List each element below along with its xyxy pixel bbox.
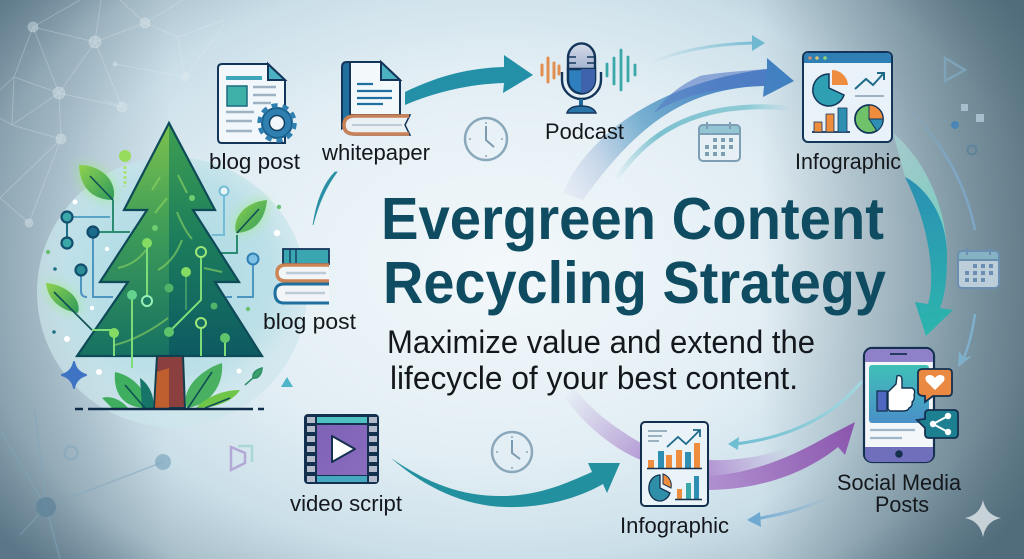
arrow: small to phone bbox=[958, 314, 975, 367]
label: blog post: blog post bbox=[209, 149, 300, 174]
arrow: big teal right bbox=[893, 133, 953, 336]
trunk bbox=[154, 356, 185, 408]
tree circuit traces bbox=[92, 243, 225, 368]
subtitle: Maximize value and extend the bbox=[387, 324, 815, 360]
heading: main title: Recycling Strategy bbox=[383, 250, 886, 316]
arc: thin teal near tree bbox=[313, 172, 337, 225]
icon: calendar right bbox=[958, 248, 999, 288]
icon: whitepaper book bbox=[342, 62, 410, 135]
icon: clock bottom bbox=[492, 432, 532, 472]
decoration: small outline icon bottom left bbox=[231, 446, 252, 470]
arrow: social back to infographic bbox=[728, 381, 862, 450]
icon: calendar top bbox=[699, 122, 740, 161]
arrow: thin top bbox=[650, 35, 765, 63]
heading: main title bbox=[381, 186, 886, 316]
decoration: network bottom left bbox=[0, 410, 171, 559]
decoration: network top left bbox=[0, 0, 224, 227]
icon: stack of books bbox=[275, 249, 329, 303]
icon: infographic dashboard top bbox=[803, 52, 892, 142]
arrow: social to infographic lower bbox=[747, 497, 830, 527]
label: Social Media Posts: Social Media bbox=[837, 470, 962, 495]
heading: main title: Evergreen Content bbox=[381, 186, 884, 252]
label: Social Media Posts: Posts bbox=[875, 492, 929, 517]
arrow: whitepaper to podcast bbox=[405, 55, 533, 105]
floating dots and sparkle bbox=[46, 200, 293, 388]
outer circuit nodes bbox=[62, 150, 258, 276]
label: Infographic bottom: Infographic bbox=[620, 513, 729, 538]
icon: infographic chart bottom bbox=[641, 422, 708, 506]
icon: blog post document with gear bbox=[218, 64, 294, 143]
ground line bbox=[75, 408, 264, 410]
label: video script: video script bbox=[290, 491, 402, 516]
arc: inner teal sweep bbox=[617, 107, 790, 178]
arrow: curved blue main bbox=[563, 58, 794, 200]
label: whitepaper: whitepaper bbox=[321, 140, 430, 165]
arrow: thin arc right bbox=[907, 107, 975, 230]
label: blog post lower: blog post bbox=[263, 309, 356, 334]
icon: video film strip bbox=[304, 414, 379, 484]
label: Podcast: Podcast bbox=[545, 119, 624, 144]
leaves bbox=[46, 165, 267, 330]
subtitle: lifecycle of your best content. bbox=[390, 360, 798, 396]
glow circle behind tree bbox=[37, 157, 307, 427]
arrow: purple to social bbox=[565, 385, 855, 490]
subtitle bbox=[387, 324, 815, 396]
icon: podcast microphone bbox=[542, 43, 635, 113]
panel: evergreen tree illustration bbox=[37, 123, 307, 427]
label: Social Media Posts bbox=[837, 470, 962, 517]
icon: phone with social reactions bbox=[864, 348, 958, 462]
icon: clock top bbox=[465, 118, 507, 160]
tree circuit nodes bbox=[109, 195, 230, 343]
arrow: video script to infographic bbox=[391, 458, 620, 507]
decoration: shapes top right bbox=[945, 58, 984, 154]
label: Infographic top: Infographic bbox=[795, 149, 901, 174]
leaf glows bbox=[46, 165, 267, 313]
outer circuit lines bbox=[67, 166, 253, 297]
decoration: sparkle bottom right bbox=[965, 500, 1001, 537]
tree canopy bbox=[77, 123, 262, 356]
foliage at base bbox=[102, 363, 240, 408]
